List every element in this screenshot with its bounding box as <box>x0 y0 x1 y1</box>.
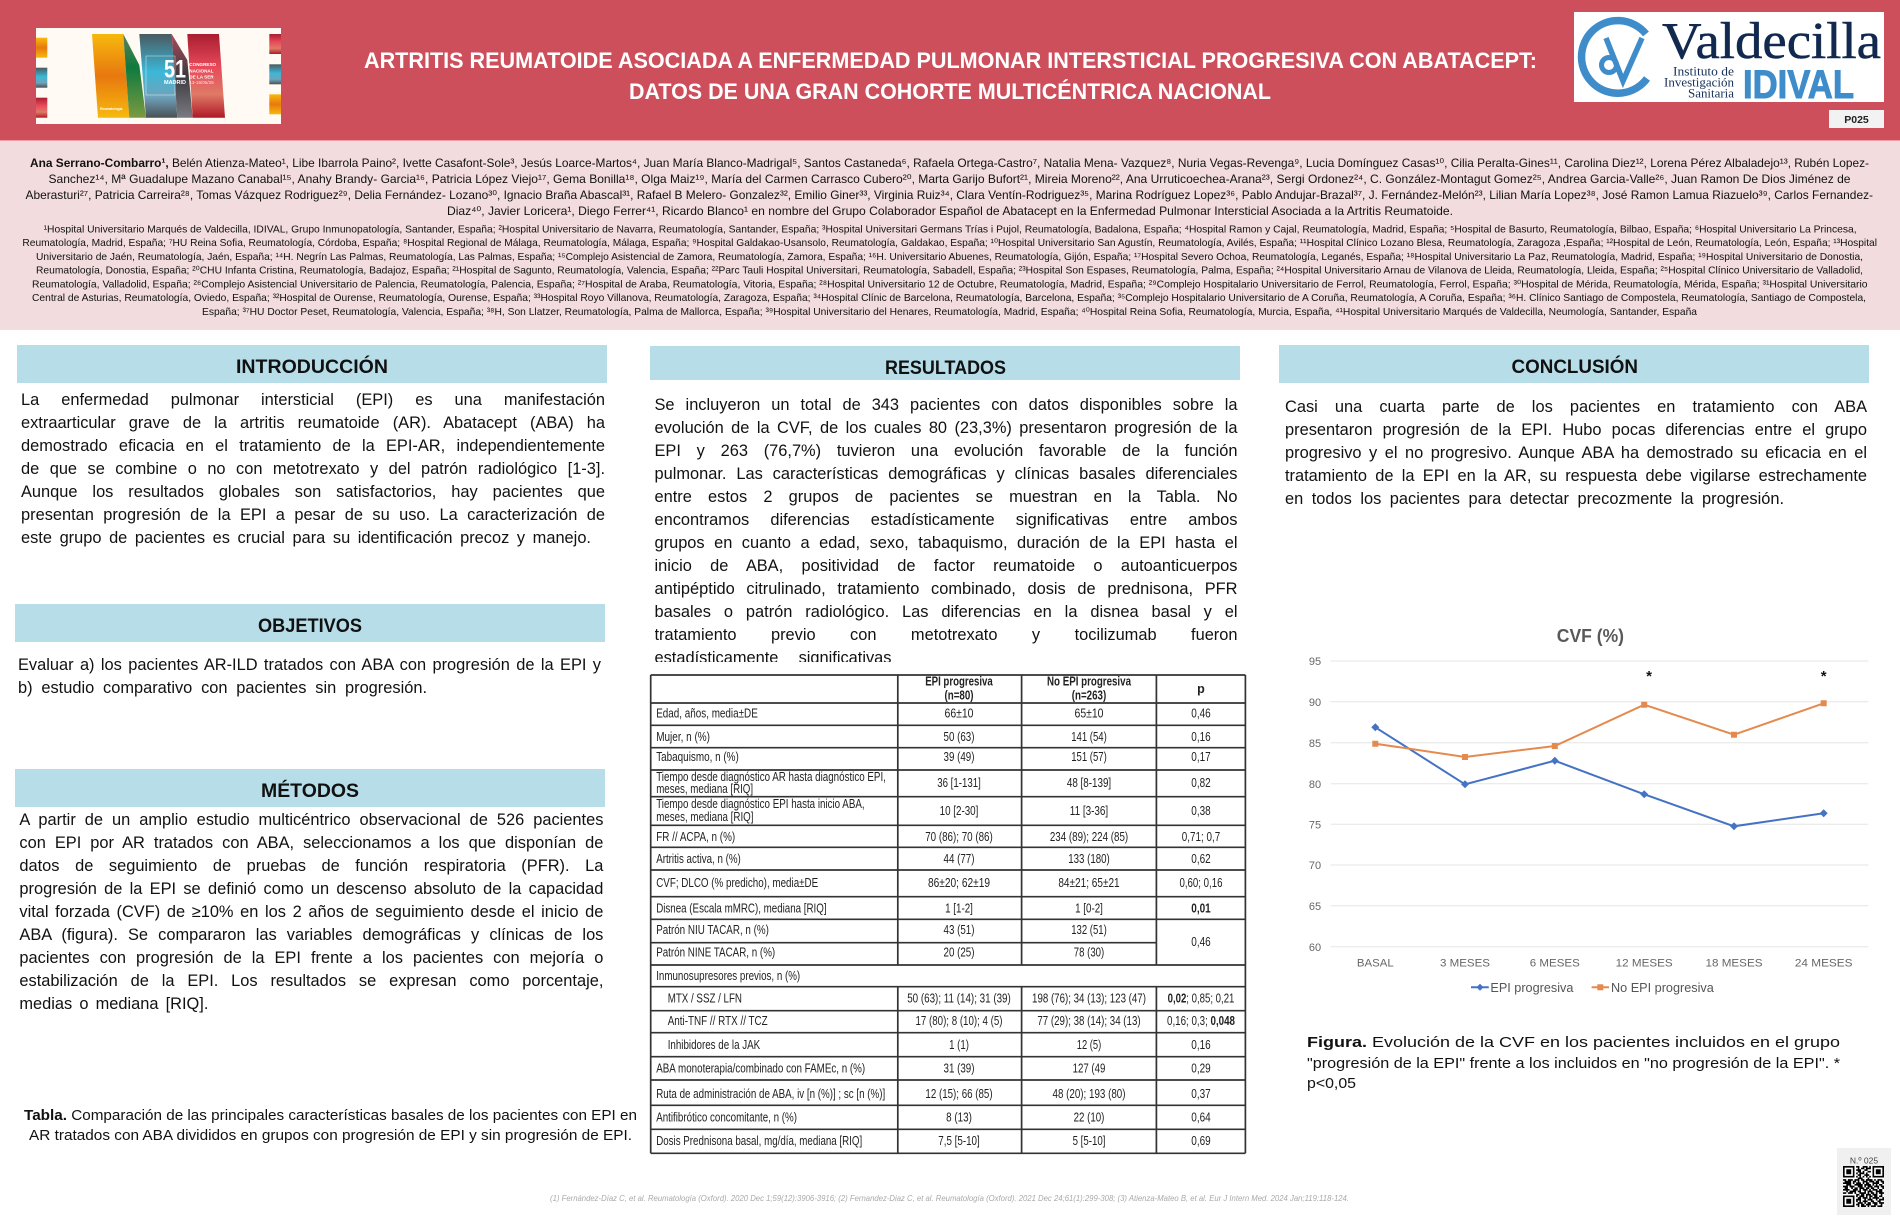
text: resultados: evolución de la CVF, de los cuales 80 (23,3%) presentaron progresión de la <box>654 419 1238 437</box>
text: métodos: ABA (figura). Se compararon las variables demográficas y clínicas de los <box>19 926 603 944</box>
x axis labels: 3 MESES <box>1440 958 1490 970</box>
column: p values: 0,69 <box>1191 1134 1211 1148</box>
column: No EPI progresiva: 132 (51) <box>1071 923 1107 937</box>
column: No EPI progresiva: 234 (89); 224 (85) <box>1050 830 1128 844</box>
congress logo: DE LA SER <box>189 74 214 79</box>
figure caption: "progresión de la EPI" frente a los incluidos en "no progresión de la EPI". * <box>1307 1055 1840 1072</box>
column: p values: 0,37 <box>1191 1087 1211 1101</box>
x axis labels: 6 MESES <box>1530 958 1580 970</box>
column: No EPI progresiva: 48 (20); 193 (80) <box>1052 1087 1126 1101</box>
column: EPI progresiva: 31 (39) <box>944 1062 974 1076</box>
table row labels: FR // ACPA, n (%) <box>656 830 735 844</box>
text: objetivos: b) estudio comparativo con pacientes sin progresión. <box>18 679 427 697</box>
column: p values: 0,71; 0,7 <box>1182 830 1220 844</box>
x axis labels <box>1357 958 1853 970</box>
column: No EPI progresiva <box>1032 706 1146 1148</box>
table header <box>925 674 1205 702</box>
column: EPI progresiva: 12 (15); 66 (85) <box>925 1087 993 1101</box>
table grid <box>651 675 1245 1153</box>
logo: Valdecilla IDIVAL: Valdecilla <box>1662 13 1881 70</box>
column: No EPI progresiva: 11 [3-36] <box>1070 804 1108 818</box>
column: No EPI progresiva: 1 [0-2] <box>1075 902 1103 916</box>
x axis labels: 12 MESES <box>1616 958 1673 970</box>
column: EPI progresiva: 70 (86); 70 (86) <box>925 830 993 844</box>
text: introducción: de que se combine o no con metotrexato y del patrón radiológico [1-3]. <box>21 460 605 478</box>
series: No EPI progresiva <box>1372 700 1827 760</box>
column: EPI progresiva: 50 (63) <box>944 730 974 744</box>
text: resultados: Se incluyeron un total de 343 pacientes con datos disponibles sobre la <box>654 396 1238 414</box>
chart legend: EPI progresiva <box>1490 980 1574 995</box>
text: introducción: presentan progresión de la EPI a pesar de su uso. La caracterización de <box>21 506 605 524</box>
header band <box>0 0 1900 140</box>
heading: resultados: RESULTADOS <box>885 358 1006 379</box>
column: No EPI progresiva: 5 [5-10] <box>1073 1134 1105 1148</box>
column: No EPI progresiva: 12 (5) <box>1077 1038 1101 1052</box>
author list <box>26 156 1873 218</box>
column: p values <box>1167 706 1235 1148</box>
logo: Valdecilla IDIVAL: Sanitaria <box>1688 87 1734 101</box>
text: introducción: este grupo de pacientes es crucial para su identificación precoz y manejo. <box>21 529 591 547</box>
text: introducción: La enfermedad pulmonar intersticial (EPI) es una manifestación <box>21 391 605 409</box>
column: EPI progresiva: 20 (25) <box>944 946 974 960</box>
text: introducción: Aunque los resultados globales son satisfactorios, hay pacientes que <box>21 483 605 501</box>
figure caption: Figura. Evolución de la CVF en los pacientes incluidos en el grupo <box>1307 1034 1840 1051</box>
column: EPI progresiva: 8 (13) <box>946 1110 972 1124</box>
table row labels: Ruta de administración de ABA, iv [n (%)] ; sc [n (%)] <box>656 1087 885 1101</box>
column: No EPI progresiva: 84±21; 65±21 <box>1058 876 1120 890</box>
y axis labels: 95 <box>1309 656 1321 668</box>
text: introducción: extraarticular grave de la artritis reumatoide (AR). Abatacept (ABA) ha <box>21 414 605 432</box>
affiliations <box>22 224 1877 318</box>
table caption: AR tratados con ABA divididos en grupos con progresión de EPI y sin progresión de EPI. <box>29 1128 632 1144</box>
poster number badge <box>1829 110 1884 128</box>
panel: objetivos <box>15 604 605 697</box>
column: p values: 0,60; 0,16 <box>1180 876 1223 890</box>
table row labels: Disnea (Escala mMRC), mediana [RIQ] <box>656 902 827 916</box>
congress logo: NACIONAL <box>189 68 214 73</box>
QR code badge <box>1837 1148 1891 1215</box>
text: resultados: inicio de ABA, positividad de factor reumatoide o autoanticuerpos <box>654 557 1238 575</box>
author list: Sanchez¹⁴, Mª Guadalupe Mazano Canabal¹⁵, Anahy Brandy- Garcia¹⁶, Patricia López Viejo¹⁷, Gema Bonilla¹⁸, Olga Maiz¹⁹, María del Carmen Carrasco Cubero²⁰, Marta Garijo Bufort²¹, Mireia Moreno²², Ana Urruticoechea-Arana²³, Sergi Ordonez²⁴, C. González-Montagut Gomez²⁵, Andrea Garcia-Valle²⁶, Juan Ramon De Dios Jiménez de <box>48 172 1851 186</box>
congress logo: CONGRESO <box>189 62 217 67</box>
x axis labels: BASAL <box>1357 958 1394 970</box>
figure caption <box>1307 1034 1840 1092</box>
table header: No EPI progresiva <box>1047 674 1132 688</box>
table header: (n=263) <box>1072 688 1106 702</box>
series: EPI progresiva <box>1371 723 1828 830</box>
text: resultados: grupos en cuanto a edad, sexo, tabaquismo, duración de la EPI hasta el <box>654 534 1238 552</box>
congress logo: Reumatología <box>100 107 123 111</box>
column: EPI progresiva: 39 (49) <box>944 750 974 764</box>
text: conclusión <box>1285 398 1867 508</box>
column: No EPI progresiva: 151 (57) <box>1071 750 1107 764</box>
text: resultados: EPI y 263 (76,7%) tuvieron una evolución favorable de la función <box>654 442 1238 460</box>
table: comparación de características basales <box>650 674 1246 1154</box>
significance asterisks: * <box>1646 668 1652 685</box>
logo: Valdecilla IDIVAL: Instituto de <box>1673 65 1734 79</box>
congress logo: MADRID <box>164 80 186 86</box>
affiliations: Reumatología, Donostia, España; ²⁰CHU Infanta Cristina, Reumatología, Badajoz, España; ²¹Hospital de Sagunto, Reumatología, Valencia, España; ²²Parc Tauli Hospital Universitari, Reumatología, Sabadell, España; ²³Hospital Son Espases, Reumatología, Palma, España; ²⁴Hospital Universitario Arnau de Vilanova de Lleida, Reumatología, Lleida, España; ²⁵Hospital Clínico Universitario de Valladolid, <box>36 265 1863 277</box>
text: objetivos: Evaluar a) los pacientes AR-ILD tratados con ABA con progresión de la EPI y <box>18 656 601 674</box>
chart title: CVF (%) <box>1557 626 1624 646</box>
column: No EPI progresiva: 65±10 <box>1074 706 1104 720</box>
authors and affiliations band <box>0 140 1900 330</box>
significance asterisks <box>1646 668 1827 685</box>
heading: conclusión <box>1279 345 1869 383</box>
text: métodos: progresión de la EPI se definió como un descenso absoluto de la capacidad <box>19 880 603 898</box>
text: resultados: antipéptido citrulinado, tratamiento combinado, dosis de prednisona, PFR <box>654 580 1238 598</box>
figure caption: p<0,05 <box>1307 1075 1356 1092</box>
table row labels: Inhibidores de la JAK <box>668 1038 761 1052</box>
table row labels: Edad, años, media±DE <box>656 706 758 720</box>
table row labels: Inmunosupresores previos, n (%) <box>656 969 800 983</box>
column: p values: 0,38 <box>1191 804 1211 818</box>
column: No EPI progresiva: 77 (29); 38 (14); 34 (13) <box>1037 1014 1141 1028</box>
affiliations: Universitario de Jaén, Reumatología, Jaén, España; ¹⁴H. Negrín Las Palmas, Reumatología, Las Palmas, España; ¹⁵Complejo Asistencial de Zamora, Reumatología, Zamora, España; ¹⁶H. Universitario Abuenes, Reumatología, Gijón, España; ¹⁷Hospital Severo Ochoa, Reumatología, Leganés, España; ¹⁸Hospital Universitario La Paz, Reumatología, Madrid, España; ¹⁹Hospital Universitario de Donostia, <box>36 251 1863 263</box>
y axis labels: 75 <box>1309 820 1321 832</box>
author list: Diaz⁴⁰, Javier Loricera¹, Diego Ferrer⁴¹, Ricardo Blanco¹ en nombre del Grupo Colaborador Español de Abatacept en la Enfermedad Pulmonar Intersticial Asociada a la Artritis Reumatoide. <box>447 204 1453 218</box>
affiliations: España; ³⁷HU Doctor Peset, Reumatología, Valencia, España; ³⁸H, Son Llatzer, Reumatología, Palma de Mallorca, España; ³⁹Hospital Universitario del Henares, Reumatología, Madrid, España; ⁴⁰Hospital Reina Sofia, Reumatología, Murcia, España, ⁴¹Hospital Universitario Marqués de Valdecilla, Neumología, Santander, España <box>202 306 1697 318</box>
author list: Aberasturi²⁷, Patricia Carreira²⁸, Tomas Vázquez Rodriguez²⁹, Delia Fernández- Lozano³⁰, Ignacio Braña Abascal³¹, Rafael B Melero- Gonzalez³², Emilio Giner³³, Virginia Ruiz³⁴, Clara Ventín-Rodriguez³⁵, Marina Rodríguez Lopez³⁶, Pablo Andujar-Brazal³⁷, J. Fernández-Melón²³, Lilian María Lopez³⁸, José Ramon Lamua Riazuelo³⁹, Carlos Fernandez- <box>26 188 1873 202</box>
text: objetivos <box>18 656 601 697</box>
table row labels: CVF; DLCO (% predicho), media±DE <box>656 876 818 890</box>
column: No EPI progresiva: 198 (76); 34 (13); 123 (47) <box>1032 992 1146 1006</box>
table row labels: Dosis Prednisona basal, mg/día, mediana [RIQ] <box>656 1134 862 1148</box>
column: p values: 0,16; 0,3; 0,048 <box>1167 1014 1235 1028</box>
line chart: CVF (%) <box>1309 626 1868 995</box>
column: p values: 0,46 <box>1191 706 1211 720</box>
column: p values: 0,17 <box>1191 750 1211 764</box>
text: métodos: con EPI por AR tratados con ABA, seleccionamos a los que disponían de <box>19 834 603 852</box>
column: p values: 0,16 <box>1191 730 1211 744</box>
column: p values: 0,46 <box>1191 935 1211 949</box>
text: métodos: estabilización de la EPI. Los resultados se expresan como porcentaje, <box>19 972 603 990</box>
panel: conclusión <box>1279 345 1869 508</box>
x axis labels: 18 MESES <box>1706 958 1762 970</box>
table caption: Tabla. Comparación de las principales características basales de los pacientes con EPI en <box>24 1108 637 1124</box>
column: No EPI progresiva: 133 (180) <box>1068 852 1110 866</box>
panel: resultados <box>650 346 1240 662</box>
table row labels <box>656 706 886 1148</box>
table row labels: Patrón NIU TACAR, n (%) <box>656 923 769 937</box>
logo: Valdecilla IDIVAL: Investigación <box>1664 76 1735 90</box>
x axis labels: 24 MESES <box>1795 958 1853 970</box>
column: EPI progresiva: 17 (80); 8 (10); 4 (5) <box>916 1014 1002 1028</box>
text: conclusión: progresivo y el no progresivo. Aunque ABA ha demostrado su eficacia en el <box>1285 444 1867 462</box>
column: EPI progresiva: 43 (51) <box>944 923 974 937</box>
title: DATOS DE UNA GRAN COHORTE MULTICÉNTRICA NACIONAL <box>629 79 1271 104</box>
y axis labels <box>1309 656 1321 954</box>
table row labels: Antifibrótico concomitante, n (%) <box>656 1110 797 1124</box>
heading: métodos <box>15 769 605 807</box>
text: métodos: vital forzada (CVF) de ≥10% en los 2 años de seguimiento desde el inicio de <box>19 903 603 921</box>
text: resultados: pulmonar. Las características demográficas y clínicas basales diferenciales <box>654 465 1238 483</box>
column: EPI progresiva: 7,5 [5-10] <box>938 1134 980 1148</box>
table row labels: Tiempo desde diagnóstico EPI hasta inicio ABA, <box>656 797 865 811</box>
table row labels: Mujer, n (%) <box>656 730 710 744</box>
column: EPI progresiva: 44 (77) <box>944 852 974 866</box>
text: métodos <box>19 811 604 1013</box>
table row labels: meses, mediana [RIQ] <box>656 810 754 824</box>
text: conclusión: en todos los pacientes para detectar precozmente la progresión. <box>1285 490 1784 508</box>
column: p values: 0,62 <box>1191 852 1211 866</box>
text: introducción: demostrado eficacia en el tratamiento de la EPI-AR, independientemente <box>21 437 605 455</box>
poster number badge: P025 <box>1844 114 1869 126</box>
column: No EPI progresiva: 78 (30) <box>1074 946 1104 960</box>
text: resultados: basales o patrón radiológico. Las diferencias en la disnea basal y el <box>654 603 1238 621</box>
table header: EPI progresiva <box>925 674 994 688</box>
column: No EPI progresiva: 127 (49 <box>1073 1062 1105 1076</box>
table row labels: ABA monoterapia/combinado con FAMEc, n (%) <box>656 1062 865 1076</box>
panel: introducción <box>17 345 607 547</box>
column: No EPI progresiva: 22 (10) <box>1074 1110 1104 1124</box>
text: resultados: encontramos diferencias estadísticamente significativas entre ambos <box>654 511 1238 529</box>
heading: objetivos <box>15 604 605 642</box>
table row labels: meses, mediana [RIQ] <box>656 782 753 796</box>
column: EPI progresiva: 1 (1) <box>949 1038 969 1052</box>
table row labels: Artritis activa, n (%) <box>656 852 741 866</box>
table caption <box>24 1108 637 1144</box>
table row labels: Patrón NINE TACAR, n (%) <box>656 946 775 960</box>
y axis labels: 70 <box>1309 860 1321 872</box>
text: resultados: tratamiento previo con metotrexato y tocilizumab fueron <box>654 626 1238 644</box>
column: EPI progresiva: 10 [2-30] <box>940 804 978 818</box>
table row labels: Tabaquismo, n (%) <box>656 750 739 764</box>
column: p values: 0,01 <box>1191 902 1211 916</box>
affiliations: Central de Asturias, Reumatología, Oviedo, España; ³²Hospital de Ourense, Reumatología, Ourense, España; ³³Hospital Royo Villanova, Reumatología, Zaragoza, España; ³⁴Hospital Clínic de Barcelona, Reumatología, Barcelona, España; ³⁵Complejo Hospitalario Universitario de A Coruña, Reumatología, A Coruña, España; ³⁶H. Clínico Santiago de Compostela, Reumatología, Santiago de Compostela, <box>32 292 1866 304</box>
column: EPI progresiva: 36 [1-131] <box>937 776 981 790</box>
author list: Ana Serrano-Combarro¹, Belén Atienza-Mateo¹, Libe Ibarrola Paino², Ivette Casafont-Sole³, Jesús Loarce-Martos⁴, Juan María Blanco-Madrigal⁵, Santos Castaneda⁶, Rafaela Ortega-Castro⁷, Natalia Mena- Vazquez⁸, Nuria Vegas-Revenga⁹, Lucia Domínguez Casas¹⁰, Cilia Peralta-Gines¹¹, Carolina Diez¹², Lorena Pérez Albaladejo¹³, Rubén Lopez- <box>30 156 1869 170</box>
column: EPI progresiva: 50 (63); 11 (14); 31 (39) <box>907 992 1011 1006</box>
QR code badge: N.º 025 <box>1850 1156 1878 1166</box>
y axis labels: 65 <box>1309 901 1321 913</box>
column: EPI progresiva: 66±10 <box>944 706 974 720</box>
table row labels: Anti-TNF // RTX // TCZ <box>668 1014 768 1028</box>
table row labels: Tiempo desde diagnóstico AR hasta diagnóstico EPI, <box>656 770 886 784</box>
panel: métodos <box>15 769 605 1013</box>
text: resultados <box>654 396 1238 662</box>
heading: resultados <box>650 346 1240 380</box>
affiliations: Reumatología, Madrid, España; ⁷HU Reina Sofia, Reumatología, Córdoba, España; ⁸Hospital Regional de Málaga, Reumatología, Málaga, España; ⁹Hospital Galdakao-Usansolo, Reumatología, Galdakao, España; ¹⁰Hospital Universitario San Agustín, Reumatología, Avilés, España; ¹¹Hospital Clínico Lozano Blesa, Reumatología, Zaragoza ,España; ¹²Hospital de León, Reumatología, León, España; ¹³Hospital <box>22 237 1877 249</box>
column: EPI progresiva: 86±20; 62±19 <box>928 876 990 890</box>
column: p values: 0,02; 0,85; 0,21 <box>1168 992 1234 1006</box>
y axis labels: 60 <box>1309 942 1321 954</box>
column: p values: 0,82 <box>1191 776 1211 790</box>
heading: métodos: MÉTODOS <box>261 780 359 802</box>
congress logo <box>36 28 281 124</box>
column: EPI progresiva: 1 [1-2] <box>945 902 973 916</box>
heading: objetivos: OBJETIVOS <box>258 616 362 637</box>
chart legend: No EPI progresiva <box>1611 980 1715 995</box>
column: p values: 0,29 <box>1191 1062 1211 1076</box>
column: No EPI progresiva: 48 [8-139] <box>1067 776 1111 790</box>
text: resultados: entre estos 2 grupos de pacientes se muestran en la Tabla. No <box>654 488 1238 506</box>
table header: p <box>1197 682 1205 696</box>
affiliations: ¹Hospital Universitario Marqués de Valdecilla, IDIVAL, Grupo Inmunopatología, Santander, España; ²Hospital Universitario de Navarra, Reumatología, Santander, España; ³Hospital Universitari Germans Trías i Pujol, Reumatología, Badalona, España; ⁴Hospital Ramon y Cajal, Reumatología, Madrid, España; ⁵Hospital de Basurto, Reumatología, Bilbao, España; ⁶Hospital Universitario La Princesa, <box>44 224 1857 236</box>
chart legend <box>1471 980 1715 995</box>
column: No EPI progresiva: 141 (54) <box>1071 730 1107 744</box>
column: p values: 0,64 <box>1191 1110 1211 1124</box>
text: introducción <box>21 391 605 547</box>
text: conclusión: presentaron progresión de la EPI. Hubo pocas diferencias entre el grupo <box>1285 421 1867 439</box>
affiliations: Reumatología, Valladolid, España; ²⁶Complejo Asistencial Universitario de Palencia, Reumatología, Palencia, España; ²⁷Hospital de Araba, Reumatología, Vitoria, España; ²⁸Hospital Universitario 12 de Octubre, Reumatología, Madrid, España; ²⁹Complejo Hospitalario Universitario de Ferrol, Reumatología, Ferrol, España; ³⁰Hospital de Mérida, Reumatología, Mérida, España; ³¹Hospital Universitario <box>32 278 1868 290</box>
table header: (n=80) <box>944 688 974 702</box>
title <box>364 48 1537 104</box>
heading: introducción: INTRODUCCIÓN <box>236 356 388 378</box>
text: métodos: datos de seguimiento de pruebas de función respiratoria (PFR). La <box>19 857 603 875</box>
y axis labels: 90 <box>1309 697 1321 709</box>
y axis labels: 80 <box>1309 779 1321 791</box>
column: p values: 0,16 <box>1191 1038 1211 1052</box>
congress logo: 51 <box>164 55 186 83</box>
heading: introducción <box>17 345 607 383</box>
text: métodos: A partir de un amplio estudio multicéntrico observacional de 526 pacientes <box>19 811 603 829</box>
heading: conclusión: CONCLUSIÓN <box>1512 356 1638 378</box>
references: (1) Fernández-Díaz C, et al. Reumatología (Oxford). 2020 Dec 1;59(12):3906-3916; (2) Fernandez-Diaz C, et al. Reumatología (Oxford). 2021 Dec 24;61(1):299-308; (3) Atienza-Mateo B, et al. Eur J Intern Med. 2024 Jan;119:118-124. <box>550 1193 1349 1203</box>
column: EPI progresiva <box>907 706 1011 1148</box>
text: conclusión: Casi una cuarta parte de los pacientes en tratamiento con ABA <box>1285 398 1867 416</box>
logo: Valdecilla IDIVAL <box>1574 12 1884 107</box>
text: conclusión: tratamiento de la EPI en la AR, su respuesta debe vigilarse estrechamente <box>1285 467 1867 485</box>
logo: Valdecilla IDIVAL: IDIVAL <box>1743 63 1854 107</box>
significance asterisks: * <box>1821 668 1827 685</box>
title: ARTRITIS REUMATOIDE ASOCIADA A ENFERMEDAD PULMONAR INTERSTICIAL PROGRESIVA CON ABATACEPT: <box>364 48 1537 73</box>
congress logo: 13-16/05/25 <box>189 80 214 85</box>
text: métodos: pacientes con progresión de la EPI frente a los pacientes con mejoría o <box>19 949 603 967</box>
table row labels: MTX / SSZ / LFN <box>668 992 742 1006</box>
text: métodos: medias o mediana [RIQ]. <box>19 995 208 1013</box>
y axis labels: 85 <box>1309 738 1321 750</box>
